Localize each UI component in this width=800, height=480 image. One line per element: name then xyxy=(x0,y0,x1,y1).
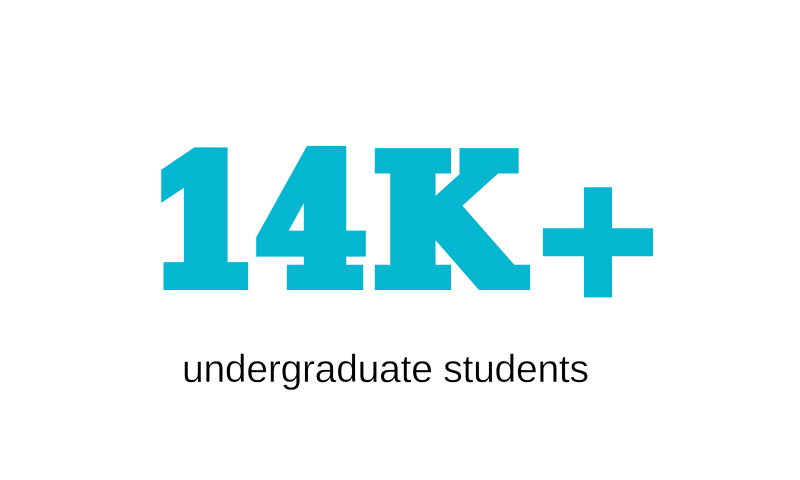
headline number: 14K+ xyxy=(151,121,665,330)
caption: undergraduate students: undergraduate students xyxy=(182,348,589,391)
headline number: 14K+: 1 xyxy=(151,124,255,321)
headline number: 14K+: 4 xyxy=(257,121,365,325)
headline number: 14K+: K xyxy=(374,121,523,325)
headline number: 14K+: + xyxy=(531,142,665,330)
